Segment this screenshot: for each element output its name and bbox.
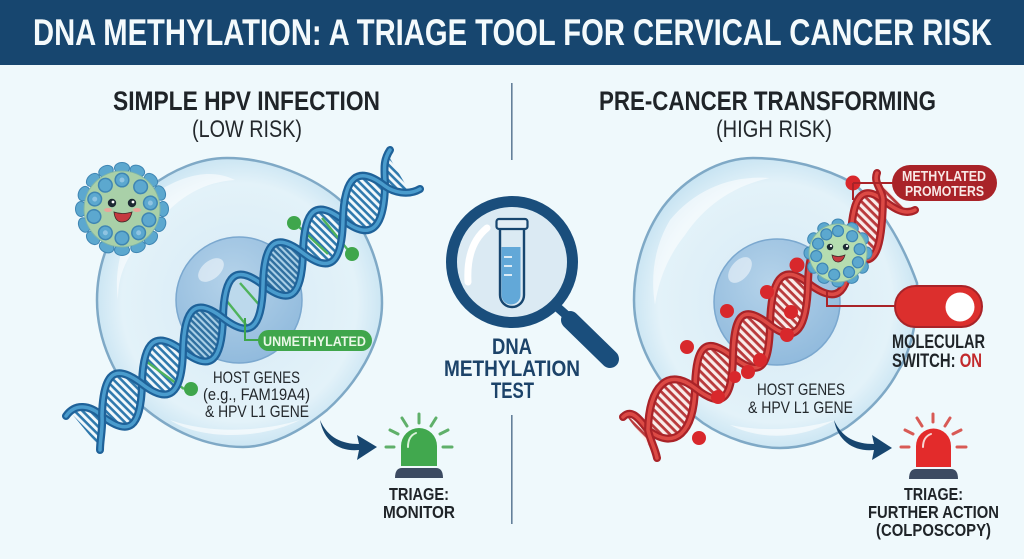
label: molecular switch on: SWITCH: ON	[892, 350, 982, 372]
label: DNA methylation test: METHYLATION	[444, 356, 580, 381]
label: host genes right: & HPV L1 GENE	[748, 399, 853, 417]
blue DNA helix	[66, 150, 420, 450]
callout: unmethylated	[245, 318, 372, 351]
label: triage further action: FURTHER ACTION	[868, 502, 999, 522]
green markers	[184, 216, 359, 396]
label: triage monitor	[383, 484, 455, 522]
label: host genes left	[203, 369, 310, 421]
cell body	[97, 158, 382, 447]
panel: low risk cell	[97, 158, 382, 447]
nucleus	[176, 237, 302, 363]
label: DNA methylation test: DNA	[492, 334, 532, 359]
label: triage further action	[868, 484, 999, 540]
label: triage monitor: TRIAGE:	[389, 484, 449, 504]
title banner	[0, 0, 1024, 65]
label: triage monitor: MONITOR	[383, 502, 455, 522]
label: host genes left: HOST GENES	[213, 369, 300, 387]
label: host genes right: HOST GENES	[757, 381, 845, 399]
label: triage further action: (COLPOSCOPY)	[876, 520, 991, 540]
cell body	[634, 158, 917, 448]
label: triage further action: TRIAGE:	[904, 484, 963, 504]
methylation markers	[680, 176, 860, 445]
heading: pre-cancer transforming: PRE-CANCER TRANSFORMING	[599, 86, 936, 116]
green rungs	[147, 218, 348, 389]
icon: smiling HPV virus	[76, 162, 168, 256]
label: molecular switch on	[892, 331, 985, 372]
label: host genes left: (e.g., FAM19A4)	[203, 386, 310, 404]
heading: pre-cancer transforming: (HIGH RISK)	[716, 116, 832, 143]
callout: methylated promoters: METHYLATED	[902, 169, 986, 185]
callout: methylated promoters: PROMOTERS	[905, 184, 984, 200]
icon: magnifying glass with test tube	[452, 202, 610, 359]
red DNA helix	[623, 173, 915, 458]
heading: simple HPV infection: SIMPLE HPV INFECTION	[113, 86, 380, 116]
arrow: low risk to monitor	[320, 420, 377, 460]
heading: simple HPV infection	[113, 86, 380, 143]
icon: green alarm light	[386, 414, 452, 478]
label: host genes right	[748, 381, 853, 417]
panel: high risk cell	[634, 158, 917, 448]
test tube	[496, 219, 528, 307]
heading: pre-cancer transforming	[599, 86, 936, 143]
callout: unmethylated: UNMETHYLATED	[263, 333, 366, 349]
label: host genes left: & HPV L1 GENE	[205, 403, 309, 421]
label: DNA methylation test: TEST	[491, 378, 534, 403]
callout: methylated promoters	[853, 165, 997, 201]
icon: red alarm light	[901, 414, 966, 479]
arrow: high risk to further action	[834, 420, 892, 460]
icon: HPV virus on DNA	[804, 219, 872, 287]
label: molecular switch on: MOLECULAR	[892, 331, 985, 353]
molecular switch toggle	[827, 286, 982, 327]
label: DNA methylation test	[444, 334, 580, 403]
nucleus	[714, 239, 840, 365]
heading: simple HPV infection: (LOW RISK)	[192, 116, 302, 143]
